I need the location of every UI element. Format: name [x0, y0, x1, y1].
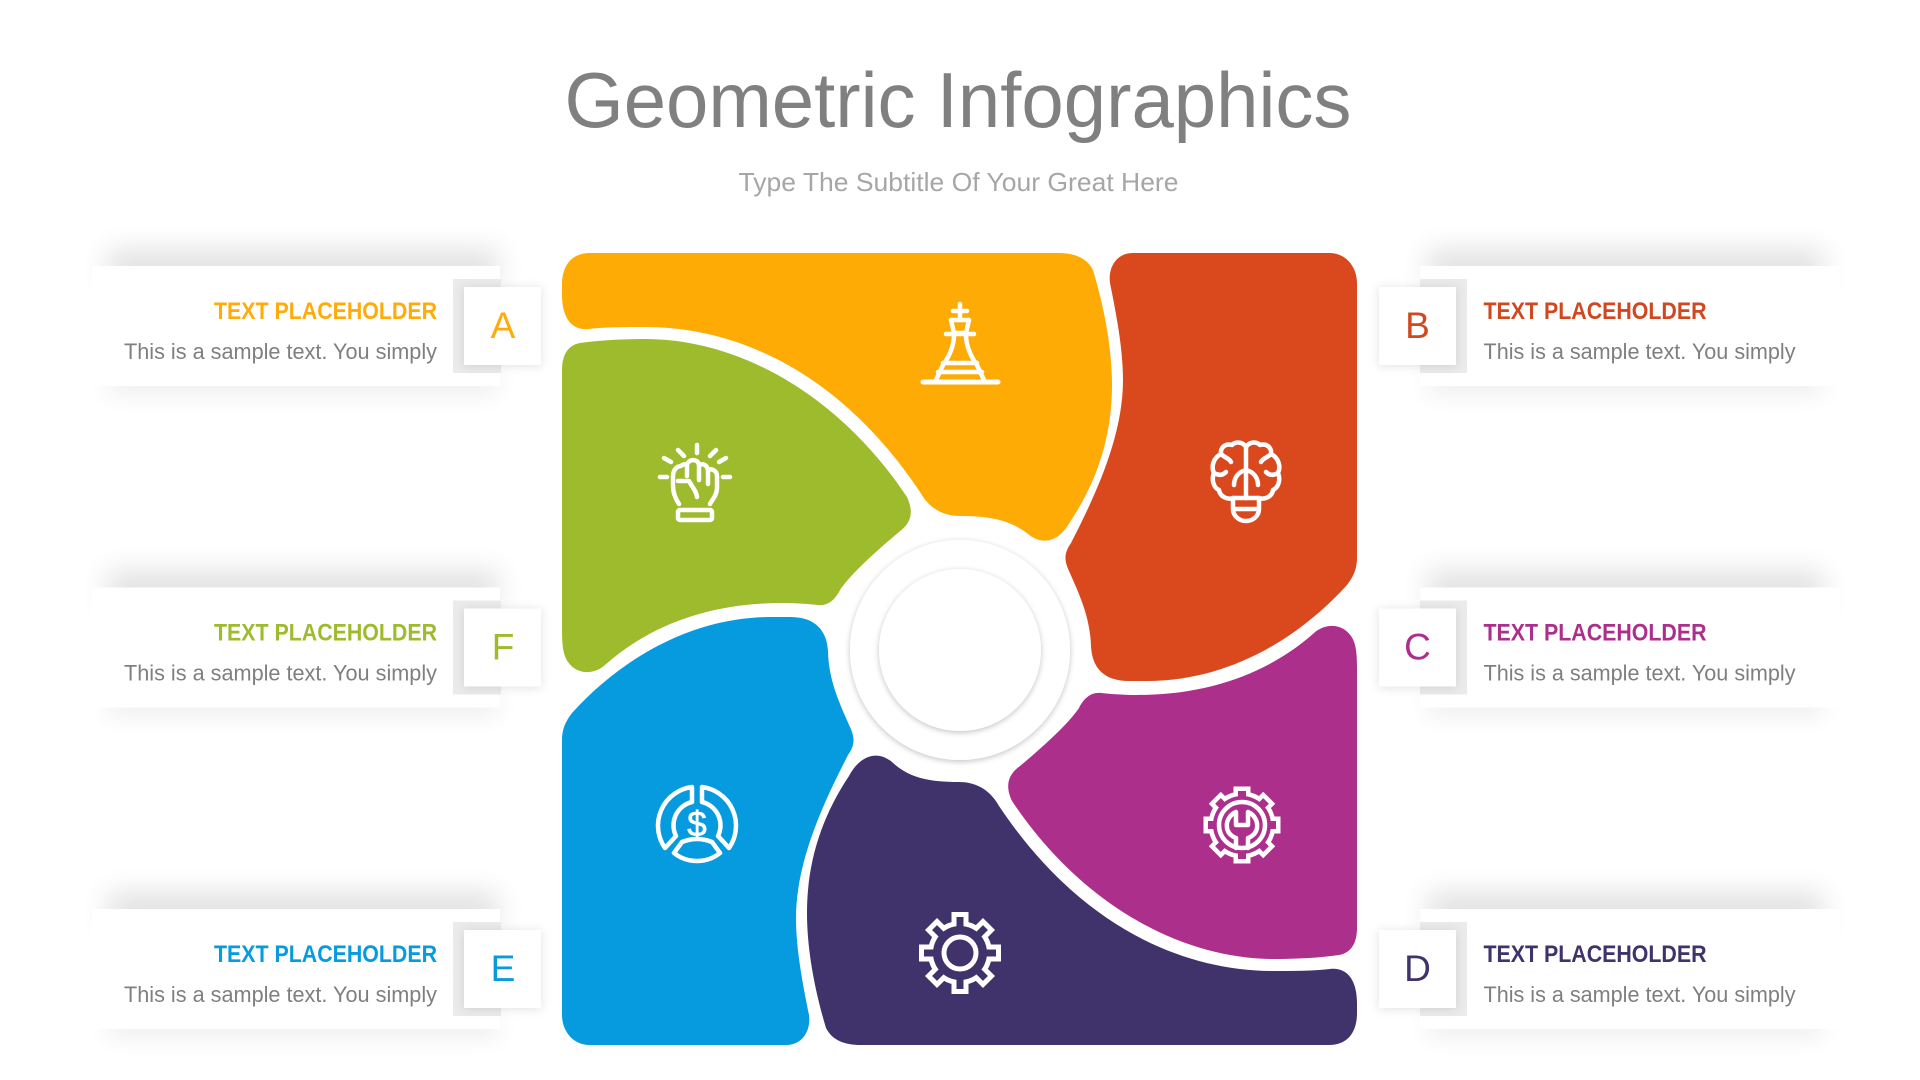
- segment: dark purple: [807, 756, 1357, 1045]
- center inner circle: [879, 569, 1041, 731]
- panel: card B: [1379, 250, 1840, 394]
- panel: card E: TEXT PLACEHOLDER: [214, 941, 437, 968]
- panel: card F: TEXT PLACEHOLDER: [214, 620, 437, 646]
- panel: card A: This is a sample text. You simply: [124, 339, 437, 364]
- panel: card F: [92, 572, 541, 716]
- panel: card C: TEXT PLACEHOLDER: [1484, 620, 1706, 646]
- panel: card F: This is a sample text. You simply: [124, 660, 437, 686]
- icon: dollar ring: [658, 787, 736, 861]
- segment: orange: [562, 253, 1112, 541]
- panel: card B: This is a sample text. You simply: [1484, 339, 1796, 364]
- subtitle: Type The Subtitle Of Your Great Here: [738, 167, 1178, 197]
- panel: card A: TEXT PLACEHOLDER: [214, 298, 437, 325]
- panel: card E: This is a sample text. You simply: [124, 982, 437, 1007]
- panel: card D: TEXT PLACEHOLDER: [1484, 941, 1706, 968]
- segment: green: [562, 339, 911, 672]
- panel: card E: E: [491, 948, 515, 989]
- panel: card D: [1379, 893, 1840, 1037]
- segment: red-orange: [1065, 253, 1357, 681]
- segment: blue: [562, 617, 854, 1045]
- panel: card B: B: [1405, 305, 1430, 346]
- icon: raised fist: [660, 445, 730, 520]
- panel: card E: [92, 893, 541, 1037]
- icon: dollar ring: $: [687, 805, 707, 844]
- icon: brain bulb: [1213, 443, 1279, 521]
- panel: card A: A: [491, 305, 516, 346]
- icon: gear: [924, 917, 996, 989]
- icon: chess king: [923, 304, 998, 382]
- panel: card D: This is a sample text. You simply: [1484, 982, 1796, 1007]
- panel: card C: [1379, 572, 1840, 716]
- panel: card F: F: [492, 626, 514, 668]
- panel: card C: This is a sample text. You simply: [1484, 660, 1796, 686]
- center outer ring: [850, 540, 1070, 760]
- panel: card A: [92, 250, 541, 394]
- panel: card C: C: [1404, 626, 1431, 668]
- segment: magenta: [1008, 626, 1357, 959]
- icon: wrench gear: [1208, 791, 1276, 859]
- panel: card D: D: [1404, 948, 1431, 989]
- title: Geometric Infographics: [564, 56, 1352, 144]
- panel: card B: TEXT PLACEHOLDER: [1484, 298, 1706, 325]
